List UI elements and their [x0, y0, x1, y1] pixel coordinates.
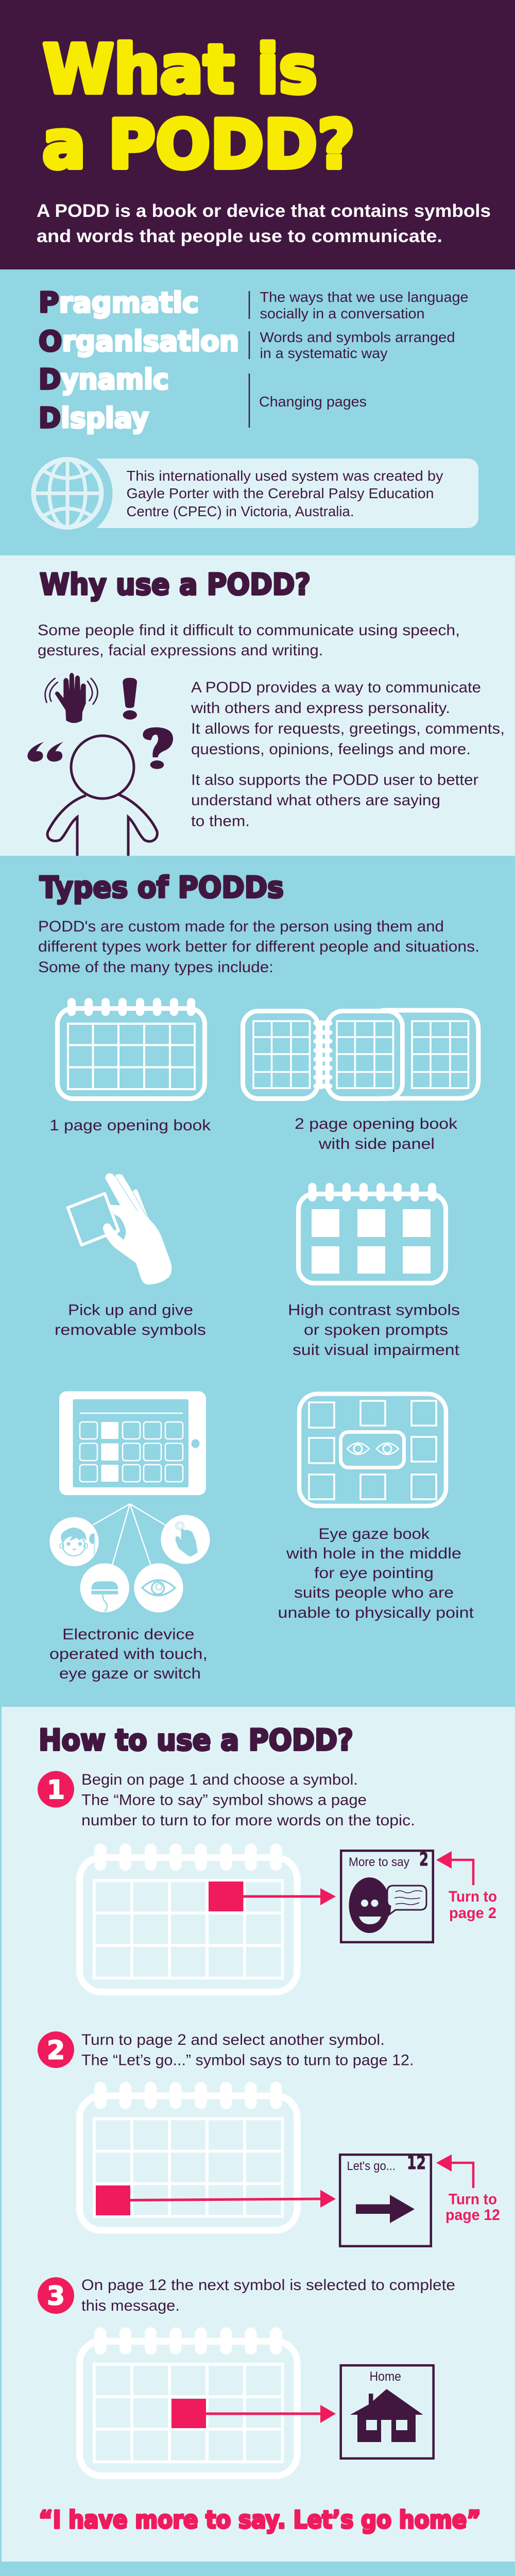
label: 1 page opening book — [49, 1117, 211, 1134]
icon: hand holding removable symbol — [68, 1173, 171, 1284]
step 3 selected symbol and arrow — [171, 2399, 336, 2428]
intro text — [38, 622, 460, 659]
panel: types of PODDs — [0, 856, 515, 1707]
label: with hole in the middle — [286, 1545, 461, 1562]
step 1 book page — [79, 1843, 297, 1992]
step 3 text: this message. — [81, 2297, 180, 2314]
title: What is — [43, 30, 317, 108]
acronym definitions: Changing pages — [259, 394, 367, 410]
icon: quotation marks — [27, 742, 63, 761]
arrow: turn to page 12: Turn to — [449, 2191, 497, 2208]
label — [295, 1115, 458, 1153]
symbol card: more to say — [341, 1849, 433, 1942]
callout: origin of PODD: This internationally used system was created by — [127, 468, 443, 484]
icon: globe — [33, 460, 101, 528]
icon: high contrast book — [299, 1183, 446, 1283]
acronym words — [39, 286, 239, 434]
acronym words: Pragmatic — [39, 286, 199, 319]
label: removable symbols — [55, 1321, 206, 1338]
heading: Types of PODDs — [40, 871, 284, 905]
label: Electronic device — [62, 1626, 195, 1643]
icon: access methods — [49, 1504, 210, 1613]
step 1 text: number to turn to for more words on the topic. — [81, 1812, 415, 1829]
arrow: turn to page 12: page 12 — [445, 2207, 500, 2224]
label — [288, 1301, 460, 1359]
body text: A PODD provides a way to communicate — [191, 679, 481, 696]
label: for eye pointing — [314, 1565, 434, 1582]
intro text: A PODD is a book or device that contains symbols — [37, 201, 491, 221]
icon: face — [60, 1528, 94, 1556]
label: eye gaze or switch — [59, 1665, 201, 1682]
panel: how to use a PODD — [0, 1707, 515, 2562]
step 1 text — [81, 1771, 415, 1829]
intro text — [38, 918, 479, 976]
body text: understand what others are saying — [191, 792, 440, 809]
icon: touch — [176, 1522, 198, 1557]
body text — [191, 679, 505, 829]
icon: person outline — [47, 736, 157, 856]
symbol card: more to say: More to say — [349, 1855, 409, 1869]
label — [278, 1526, 474, 1621]
callout: origin of PODD — [96, 459, 478, 528]
label: High contrast symbols — [288, 1301, 460, 1319]
heading: How to use a PODD? — [39, 1723, 353, 1757]
symbol card: more to say: 2 — [419, 1849, 428, 1870]
acronym words: Display — [39, 402, 149, 434]
step 1 text: Begin on page 1 and choose a symbol. — [81, 1771, 358, 1788]
body text: to them. — [191, 813, 250, 829]
symbol card: let's go: Let's go... — [347, 2159, 396, 2173]
body text: It allows for requests, greetings, comments, — [191, 720, 505, 737]
body text: It also supports the PODD user to better — [191, 772, 478, 788]
intro text: and words that people use to communicate. — [37, 226, 442, 246]
intro text — [37, 201, 491, 246]
heading: Why use a PODD? — [40, 568, 311, 602]
acronym definitions: in a systematic way — [260, 345, 387, 361]
arrow: turn to page 12 — [436, 2155, 500, 2224]
panel: title header — [0, 0, 515, 269]
step 1 number — [38, 1771, 74, 1807]
step 3 number — [38, 2277, 74, 2314]
intro text: Some of the many types include: — [38, 959, 273, 976]
callout: origin of PODD: Centre (CPEC) in Victoria, Australia. — [127, 503, 354, 519]
icon: 2 page opening book with side panel — [243, 1010, 478, 1098]
body text: with others and express personality. — [191, 700, 450, 717]
step 2 book page — [79, 2082, 297, 2230]
label: unable to physically point — [278, 1604, 474, 1621]
arrow: turn to page 2 — [436, 1851, 497, 1922]
step 2 selected symbol and arrow — [96, 2185, 336, 2215]
acronym definitions — [259, 289, 469, 410]
label: 2 page opening book — [295, 1115, 458, 1132]
step 3 number: 3 — [47, 2281, 65, 2311]
label: or spoken prompts — [304, 1321, 448, 1338]
callout: origin of PODD: Gayle Porter with the Cerebral Palsy Education — [127, 485, 434, 501]
icon: 1 page opening book — [58, 998, 205, 1098]
step 3 book page — [79, 2328, 297, 2476]
acronym definitions: The ways that we use language — [260, 289, 469, 305]
symbol card: let's go: 12 — [407, 2153, 426, 2174]
step 3 text — [81, 2277, 455, 2314]
step 1 text: The “More to say” symbol shows a page — [81, 1792, 367, 1808]
symbol card: let's go — [340, 2153, 431, 2246]
step 2 text — [81, 2031, 414, 2069]
icon: question mark — [143, 727, 173, 769]
acronym words: Organisation — [39, 325, 239, 358]
title: a PODD? — [42, 105, 355, 183]
symbol card: home — [341, 2365, 434, 2459]
icon: waving hand — [45, 673, 97, 723]
icon: eye — [142, 1580, 175, 1596]
step 1 selected symbol and arrow — [209, 1882, 336, 1911]
panel: why use a PODD — [0, 555, 515, 856]
step 2 text: Turn to page 2 and select another symbol. — [81, 2031, 385, 2048]
intro text: gestures, facial expressions and writing. — [38, 642, 323, 659]
intro text: Some people find it difficult to communicate using speech, — [38, 622, 460, 639]
icon: exclamation mark — [123, 678, 137, 720]
label: Pick up and give — [68, 1301, 193, 1319]
acronym words: Dynamic — [39, 363, 169, 396]
step 3 text: On page 12 the next symbol is selected to complete — [81, 2277, 455, 2294]
acronym definitions: socially in a conversation — [260, 306, 424, 321]
icon: eye gaze book — [299, 1394, 446, 1506]
label: with side panel — [318, 1136, 435, 1153]
arrow: turn to page 2: Turn to — [449, 1888, 497, 1905]
icon: switch — [91, 1581, 118, 1612]
label: operated with touch, — [49, 1646, 208, 1663]
label — [55, 1301, 206, 1338]
label — [49, 1626, 208, 1682]
step 2 number — [38, 2031, 74, 2068]
label: suit visual impairment — [293, 1342, 460, 1359]
step 2 number: 2 — [47, 2035, 65, 2065]
title — [42, 30, 355, 183]
body text: questions, opinions, feelings and more. — [191, 741, 471, 758]
step 1 number: 1 — [47, 1775, 65, 1805]
intro text: different types work better for different people and situations. — [38, 938, 479, 955]
label: Eye gaze book — [318, 1526, 430, 1543]
arrow: turn to page 2: page 2 — [449, 1905, 496, 1922]
label: suits people who are — [294, 1584, 454, 1601]
step 2 text: The “Let’s go...” symbol says to turn to page 12. — [81, 2052, 414, 2069]
panel: communication partner — [0, 2562, 515, 2576]
icon: electronic tablet device — [59, 1391, 206, 1495]
symbol card: home: Home — [370, 2369, 401, 2384]
panel: PODD acronym — [0, 269, 515, 555]
acronym definitions: Words and symbols arranged — [260, 329, 455, 345]
intro text: PODD's are custom made for the person using them and — [38, 918, 444, 935]
